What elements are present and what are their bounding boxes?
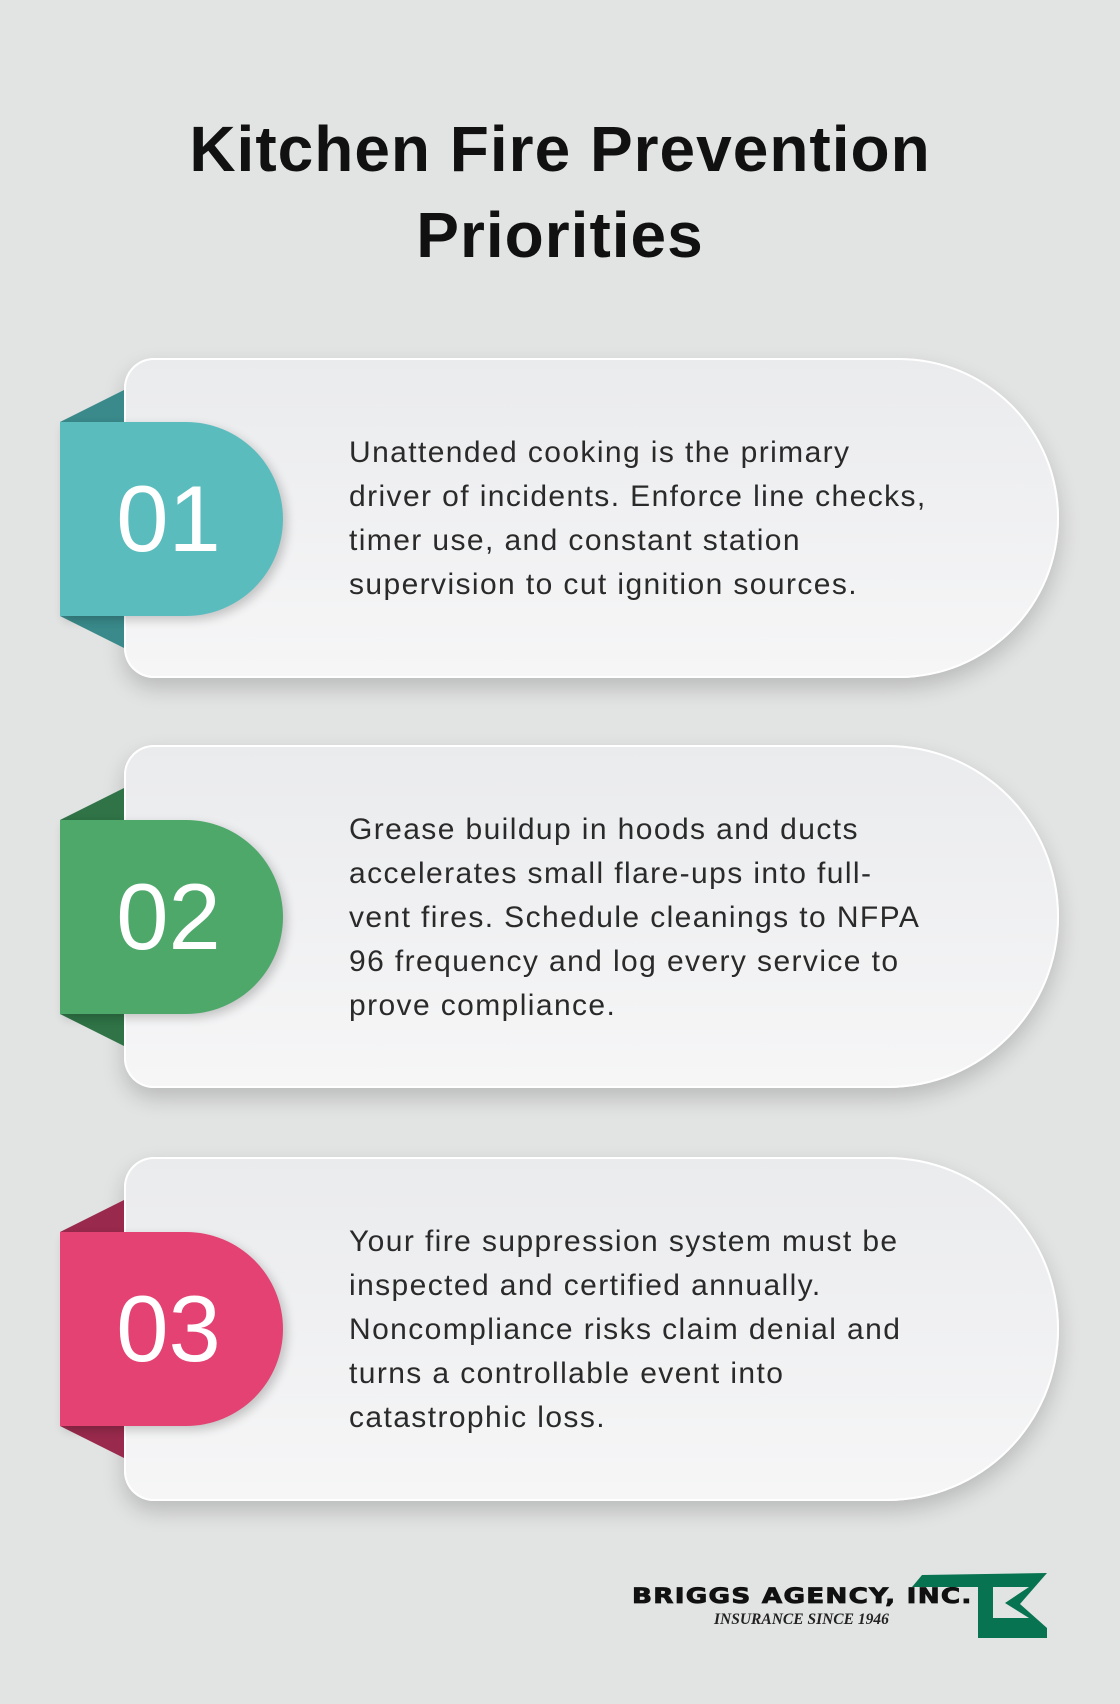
text 1: supervision to cut ignition sources. — [349, 568, 858, 601]
text 2 — [349, 813, 920, 1022]
panel: step 1 — [60, 358, 1067, 696]
title: Kitchen Fire Prevention — [189, 113, 931, 185]
fold 1 — [60, 390, 124, 648]
text 3: Noncompliance risks claim denial and — [349, 1313, 901, 1346]
title: Priorities — [416, 199, 704, 271]
logo mark — [912, 1573, 1047, 1638]
text 2: vent fires. Schedule cleanings to NFPA — [349, 901, 920, 934]
text 2: accelerates small flare-ups into full- — [349, 857, 872, 890]
text 1: driver of incidents. Enforce line checks, — [349, 480, 927, 513]
text 3: inspected and certified annually. — [349, 1269, 822, 1302]
badge 02: 02 — [116, 864, 221, 969]
badge 03 — [60, 1232, 283, 1426]
fold 2 — [60, 788, 124, 1046]
logo — [632, 1573, 1047, 1638]
card 3 — [124, 1157, 1059, 1501]
logo tagline: INSURANCE SINCE 1946 — [714, 1611, 889, 1628]
text 2: Grease buildup in hoods and ducts — [349, 813, 859, 846]
badge 01: 01 — [116, 466, 221, 571]
title — [189, 113, 931, 271]
text 3: Your fire suppression system must be — [349, 1225, 899, 1258]
text 3: catastrophic loss. — [349, 1401, 606, 1434]
badge 01 — [60, 422, 283, 616]
fold 3 — [60, 1200, 124, 1458]
card 1 — [124, 358, 1059, 678]
badge 03: 03 — [116, 1276, 221, 1381]
text 1: Unattended cooking is the primary — [349, 436, 850, 469]
text 3 — [349, 1225, 901, 1434]
text 3: turns a controllable event into — [349, 1357, 784, 1390]
text 1: timer use, and constant station — [349, 524, 801, 557]
card 2 — [124, 745, 1059, 1088]
badge 02 — [60, 820, 283, 1014]
logo text: BRIGGS AGENCY, INC. — [632, 1584, 973, 1608]
panel: step 2 — [60, 745, 1067, 1106]
text 1 — [349, 436, 927, 601]
text 2: prove compliance. — [349, 989, 616, 1022]
panel: step 3 — [60, 1157, 1067, 1520]
text 2: 96 frequency and log every service to — [349, 945, 899, 978]
